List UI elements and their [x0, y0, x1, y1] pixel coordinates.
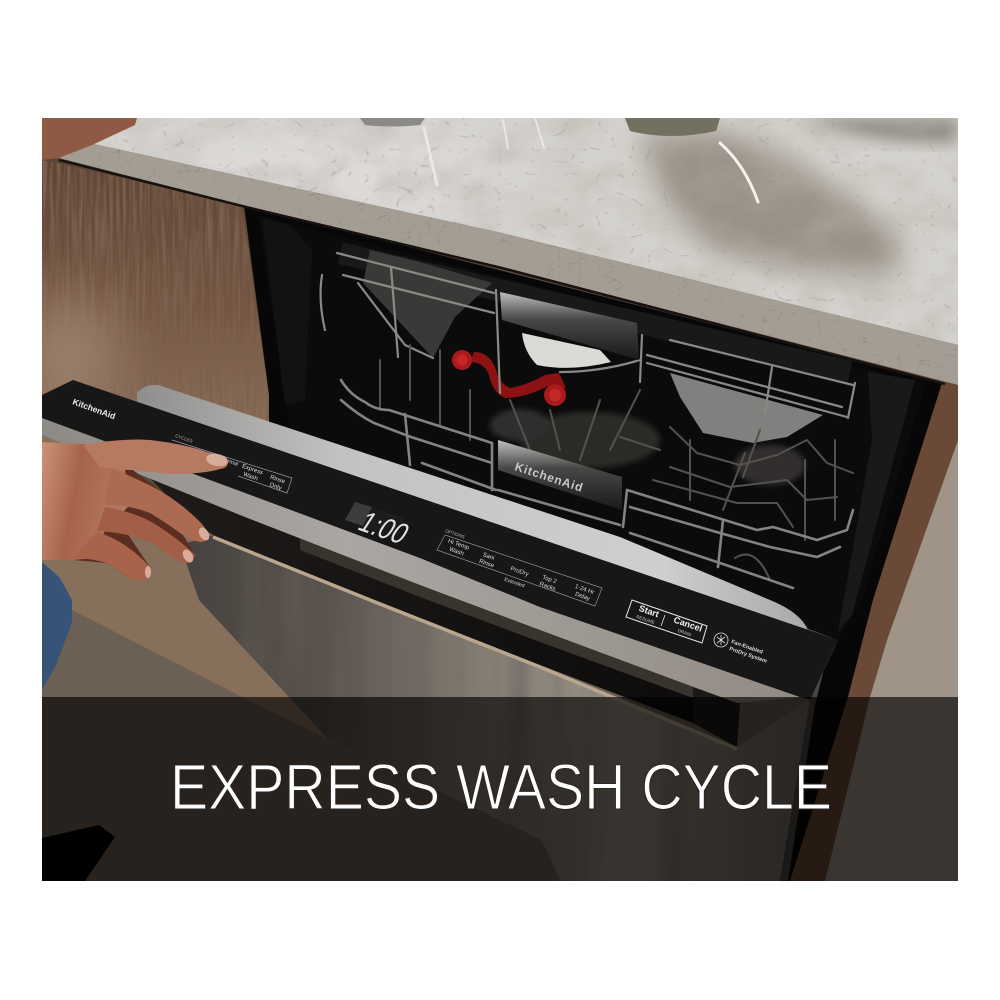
- white bowl: [522, 333, 611, 368]
- cycle labels: [227, 459, 285, 490]
- title: EXPRESS WASH CYCLE: [170, 751, 832, 823]
- cycle labels: Rinse: [269, 475, 286, 486]
- time display: [345, 502, 408, 543]
- upper rack wires: [321, 253, 855, 418]
- fan enabled label: ProDry System: [728, 646, 768, 665]
- lower rack tines: [380, 345, 853, 580]
- pot on counter: [625, 118, 720, 136]
- cycle labels: Wash: [242, 472, 258, 482]
- start and cancel button: DRAIN: [677, 628, 692, 637]
- lower rack wires: [341, 380, 853, 588]
- cycles label: CYCLES: [175, 433, 193, 444]
- title band: [42, 697, 958, 881]
- middle finger: [105, 467, 208, 542]
- option labels: Racks: [538, 582, 556, 593]
- start and cancel button: [626, 600, 707, 643]
- start and cancel button: RESUME: [636, 614, 655, 625]
- lower rack dishes: [490, 409, 805, 485]
- option labels: [447, 539, 595, 602]
- fan enabled label: Fan-Enabled: [730, 639, 764, 656]
- jeans: [42, 562, 72, 690]
- grey plate: [670, 373, 823, 443]
- recess reflection: [300, 538, 693, 698]
- start and cancel button: Cancel: [672, 615, 704, 634]
- option labels: Top 2: [541, 575, 558, 585]
- option labels: Extended: [503, 577, 525, 589]
- fan icon: [714, 633, 728, 647]
- cycle labels: Only: [269, 482, 282, 492]
- option labels: 1-24 Hr: [574, 584, 595, 596]
- options outline: [437, 535, 602, 606]
- marble countertop front edge: [42, 140, 958, 390]
- cycle labels: Express: [241, 464, 264, 476]
- cycle labels: Normal: [220, 456, 239, 468]
- option labels: Delay: [574, 592, 591, 602]
- door top edge highlight: [213, 537, 737, 749]
- fingernails: [145, 452, 229, 578]
- handle end cap: [693, 687, 740, 747]
- floor: [42, 610, 837, 881]
- door right sliver: [780, 671, 824, 881]
- cycle buttons outline: [172, 440, 292, 493]
- lower rack handle with brand mark: [498, 440, 622, 510]
- right floor: [825, 440, 958, 881]
- glassware in upper rack: [363, 250, 492, 358]
- counter shadow line: [59, 160, 945, 384]
- red spray arm: [452, 350, 566, 406]
- backdrop: [42, 144, 958, 540]
- shoe: [42, 825, 115, 881]
- steel top rim: [137, 385, 808, 630]
- arm at top left: [42, 118, 137, 160]
- marble countertop surface: [94, 118, 958, 345]
- start and cancel button: Start: [638, 603, 660, 619]
- upper rack handle: [500, 292, 639, 360]
- brand name: KitchenAid: [71, 396, 117, 421]
- option labels: Sani: [482, 552, 495, 562]
- lower cabinet toe strip: [42, 430, 329, 740]
- lower steel lip: [42, 418, 800, 703]
- option labels: Wash: [448, 547, 464, 557]
- index finger: [83, 440, 228, 474]
- option labels: Rinse: [478, 559, 495, 570]
- left wood cabinet: [42, 160, 269, 440]
- ring finger: [97, 507, 195, 563]
- option labels: ProDry: [510, 566, 529, 578]
- option labels: Hi Temp: [447, 539, 470, 552]
- dark recess under lip: [150, 478, 693, 723]
- right wood strip: [790, 383, 958, 881]
- photo: [20, 118, 958, 885]
- dishwasher tub interior: [244, 205, 942, 881]
- counter reflections: [424, 118, 758, 202]
- door front stainless: [186, 535, 787, 881]
- time display: 1:00: [352, 506, 415, 550]
- infographic: [42, 118, 958, 881]
- glass on counter: [360, 118, 425, 126]
- palm: [42, 442, 130, 560]
- lower rack handle with brand mark: KitchenAid: [513, 460, 585, 495]
- control panel: [42, 380, 838, 700]
- options label: OPTIONS: [445, 528, 465, 540]
- pinky finger: [73, 532, 151, 580]
- hand shadow silhouette: [42, 440, 228, 579]
- hand on panel: [42, 440, 229, 580]
